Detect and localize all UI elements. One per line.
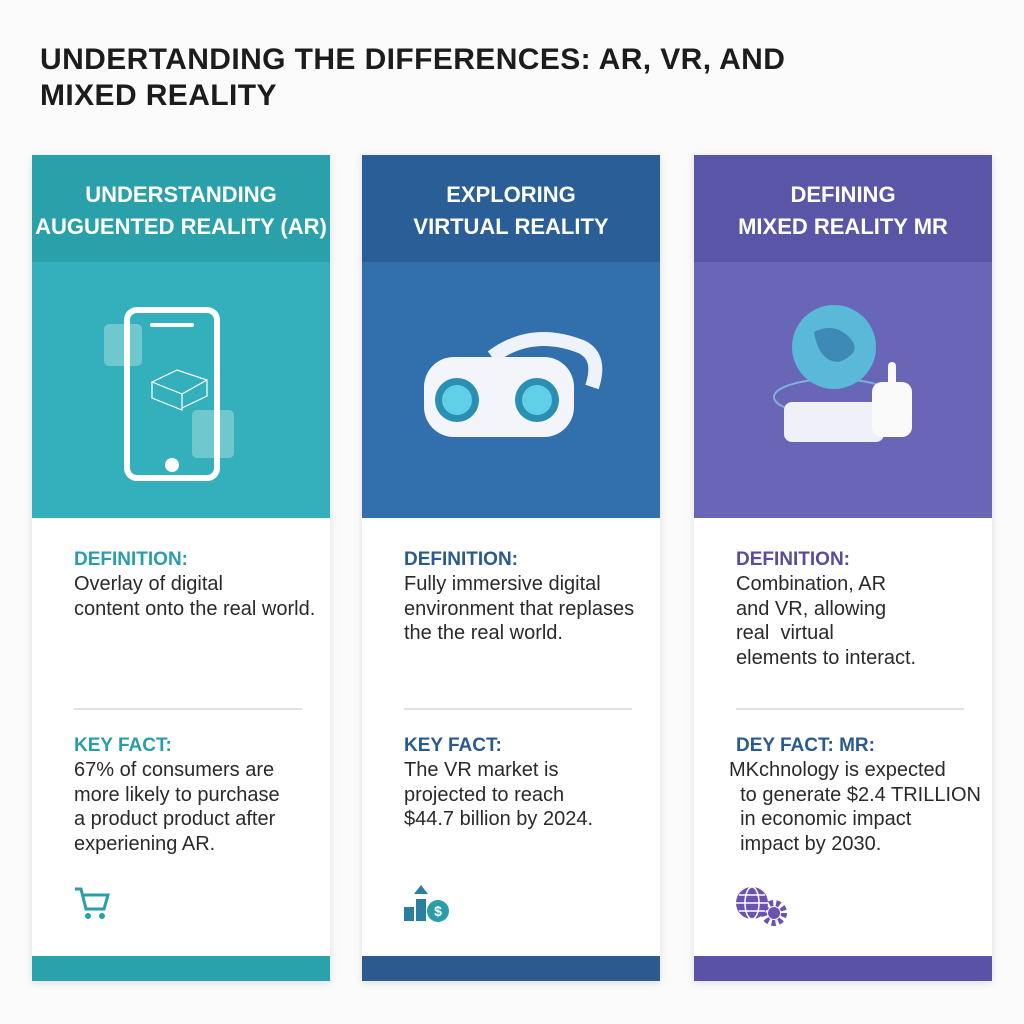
text: definition: elements to interact.: [736, 646, 916, 668]
icon: cart: [75, 888, 110, 919]
text: definition: Overlay of digital: [74, 573, 223, 595]
text: definition: and VR, allowing: [736, 598, 886, 620]
label: definition: DEFINITION:: [736, 549, 850, 570]
text: definition: real virtual: [736, 622, 834, 644]
panel: AR: [32, 155, 330, 981]
label: key fact: DEY FACT: MR:: [736, 735, 875, 756]
title: UNDERTANDING THE DIFFERENCES: AR, VR, AND: [40, 43, 785, 76]
text: key fact: [74, 759, 280, 854]
label: key fact: KEY FACT:: [74, 735, 172, 756]
header: MR: DEFINING: [790, 182, 896, 207]
icon: growth dollar: [404, 885, 449, 922]
text: key fact: a product product after: [74, 808, 275, 830]
header: AR: UNDERSTANDING: [85, 182, 277, 207]
text: key fact: 67% of consumers are: [74, 759, 274, 781]
label: definition: DEFINITION:: [74, 549, 188, 570]
text: key fact: in economic impact: [740, 808, 911, 830]
header: AR: [32, 155, 330, 262]
header: VR: VIRTUAL REALITY: [413, 214, 609, 239]
panel: MR: [694, 155, 992, 981]
label: definition: DEFINITION:: [404, 549, 518, 570]
text: key fact: [729, 759, 981, 854]
text: definition: Fully immersive digital: [404, 573, 601, 595]
header: AR: AUGUENTED REALITY (AR): [35, 214, 327, 239]
text: key fact: [404, 759, 593, 830]
label: key fact: KEY FACT:: [404, 735, 502, 756]
icon: growth dollar: $: [434, 903, 442, 919]
icon: globe gear: [736, 887, 787, 926]
title: [40, 43, 785, 112]
text: key fact: MKchnology is expected: [729, 759, 946, 781]
text: key fact: $44.7 billion by 2024.: [404, 808, 593, 830]
text: definition: Combination, AR: [736, 573, 886, 595]
text: definition: the the real world.: [404, 622, 563, 644]
header: MR: MIXED REALITY MR: [738, 214, 948, 239]
header: MR: [694, 155, 992, 262]
text: key fact: impact by 2030.: [740, 832, 881, 854]
text: key fact: The VR market is: [404, 759, 558, 781]
text: definition: [74, 573, 315, 620]
bottom bar: [362, 956, 660, 981]
title: MIXED REALITY: [40, 79, 277, 112]
text: definition: [404, 573, 634, 644]
text: key fact: experiening AR.: [74, 832, 215, 854]
text: definition: environment that replases: [404, 598, 634, 620]
text: key fact: projected to reach: [404, 784, 564, 806]
text: key fact: more likely to purchase: [74, 784, 280, 806]
text: key fact: to generate $2.4 TRILLION: [740, 784, 981, 806]
header: VR: [362, 155, 660, 262]
illustration: phone AR: [32, 262, 330, 518]
text: definition: [736, 573, 916, 668]
text: definition: content onto the real world.: [74, 598, 315, 620]
illustration: globe and hand: [694, 262, 992, 518]
panel: VR: [362, 155, 660, 981]
header: VR: EXPLORING: [446, 182, 576, 207]
bottom bar: [694, 956, 992, 981]
bottom bar: [32, 956, 330, 981]
illustration: VR headset: [362, 262, 660, 518]
